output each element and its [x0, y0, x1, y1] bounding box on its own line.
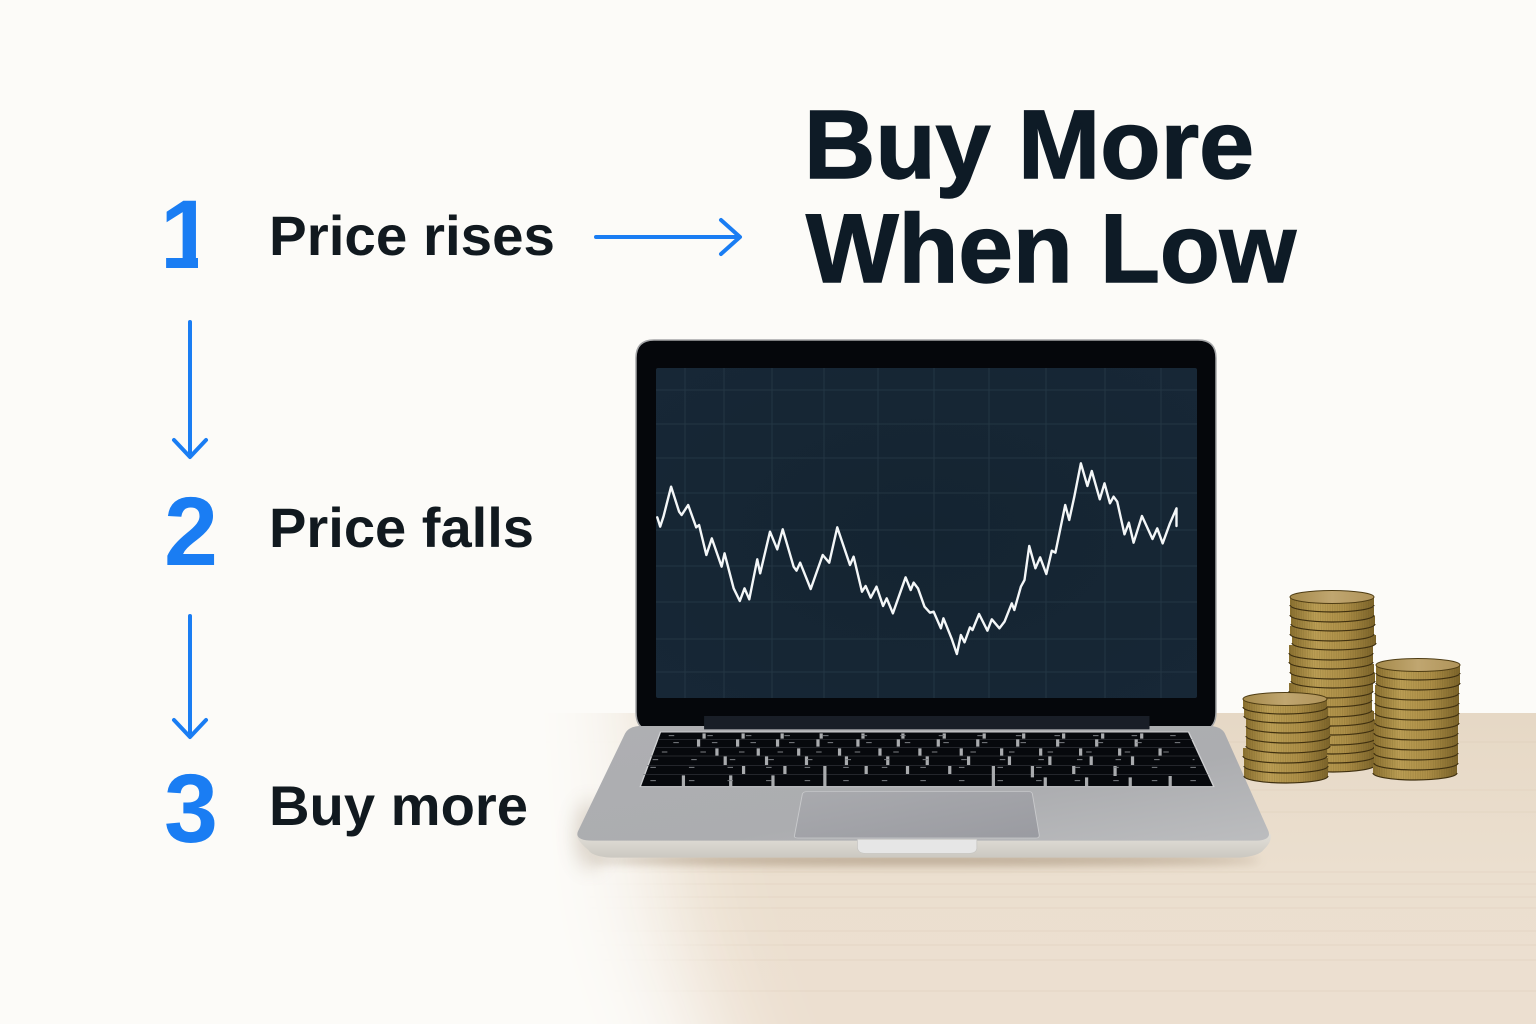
icon: coin stacks	[1243, 590, 1460, 783]
step 3: buy more	[164, 754, 528, 863]
arrow: price rises to title	[596, 220, 740, 254]
number 3: 3	[164, 754, 218, 863]
step 2: price falls	[164, 477, 534, 586]
trackpad	[794, 792, 1039, 838]
price line chart	[657, 463, 1176, 654]
title: When Low	[806, 194, 1297, 303]
number 1: 1	[160, 180, 214, 289]
label: buy more: Buy more	[269, 774, 528, 837]
hinge	[704, 716, 1150, 729]
title: Buy More	[804, 90, 1254, 199]
laptop base	[577, 716, 1271, 858]
label: price falls: Price falls	[269, 496, 534, 559]
icon: laptop	[576, 340, 1271, 869]
front notch	[857, 839, 977, 853]
coin stack: left	[1243, 692, 1330, 783]
step 1: price rises	[166, 200, 553, 268]
number 2: 2	[164, 477, 218, 586]
coin stack: middle	[1288, 590, 1376, 772]
arrow: step 1 to step 2	[174, 322, 206, 457]
arrow: step 2 to step 3	[174, 616, 206, 737]
label: price rises: Price rises	[269, 204, 555, 267]
infographic canvas	[166, 110, 1536, 1024]
coin stack: right	[1373, 658, 1460, 780]
laptop lid	[636, 340, 1216, 730]
keyboard	[640, 732, 1214, 787]
title	[804, 90, 1297, 303]
laptop shadow	[576, 801, 1260, 869]
laptop screen	[656, 368, 1197, 698]
wooden desk	[600, 713, 1536, 1024]
